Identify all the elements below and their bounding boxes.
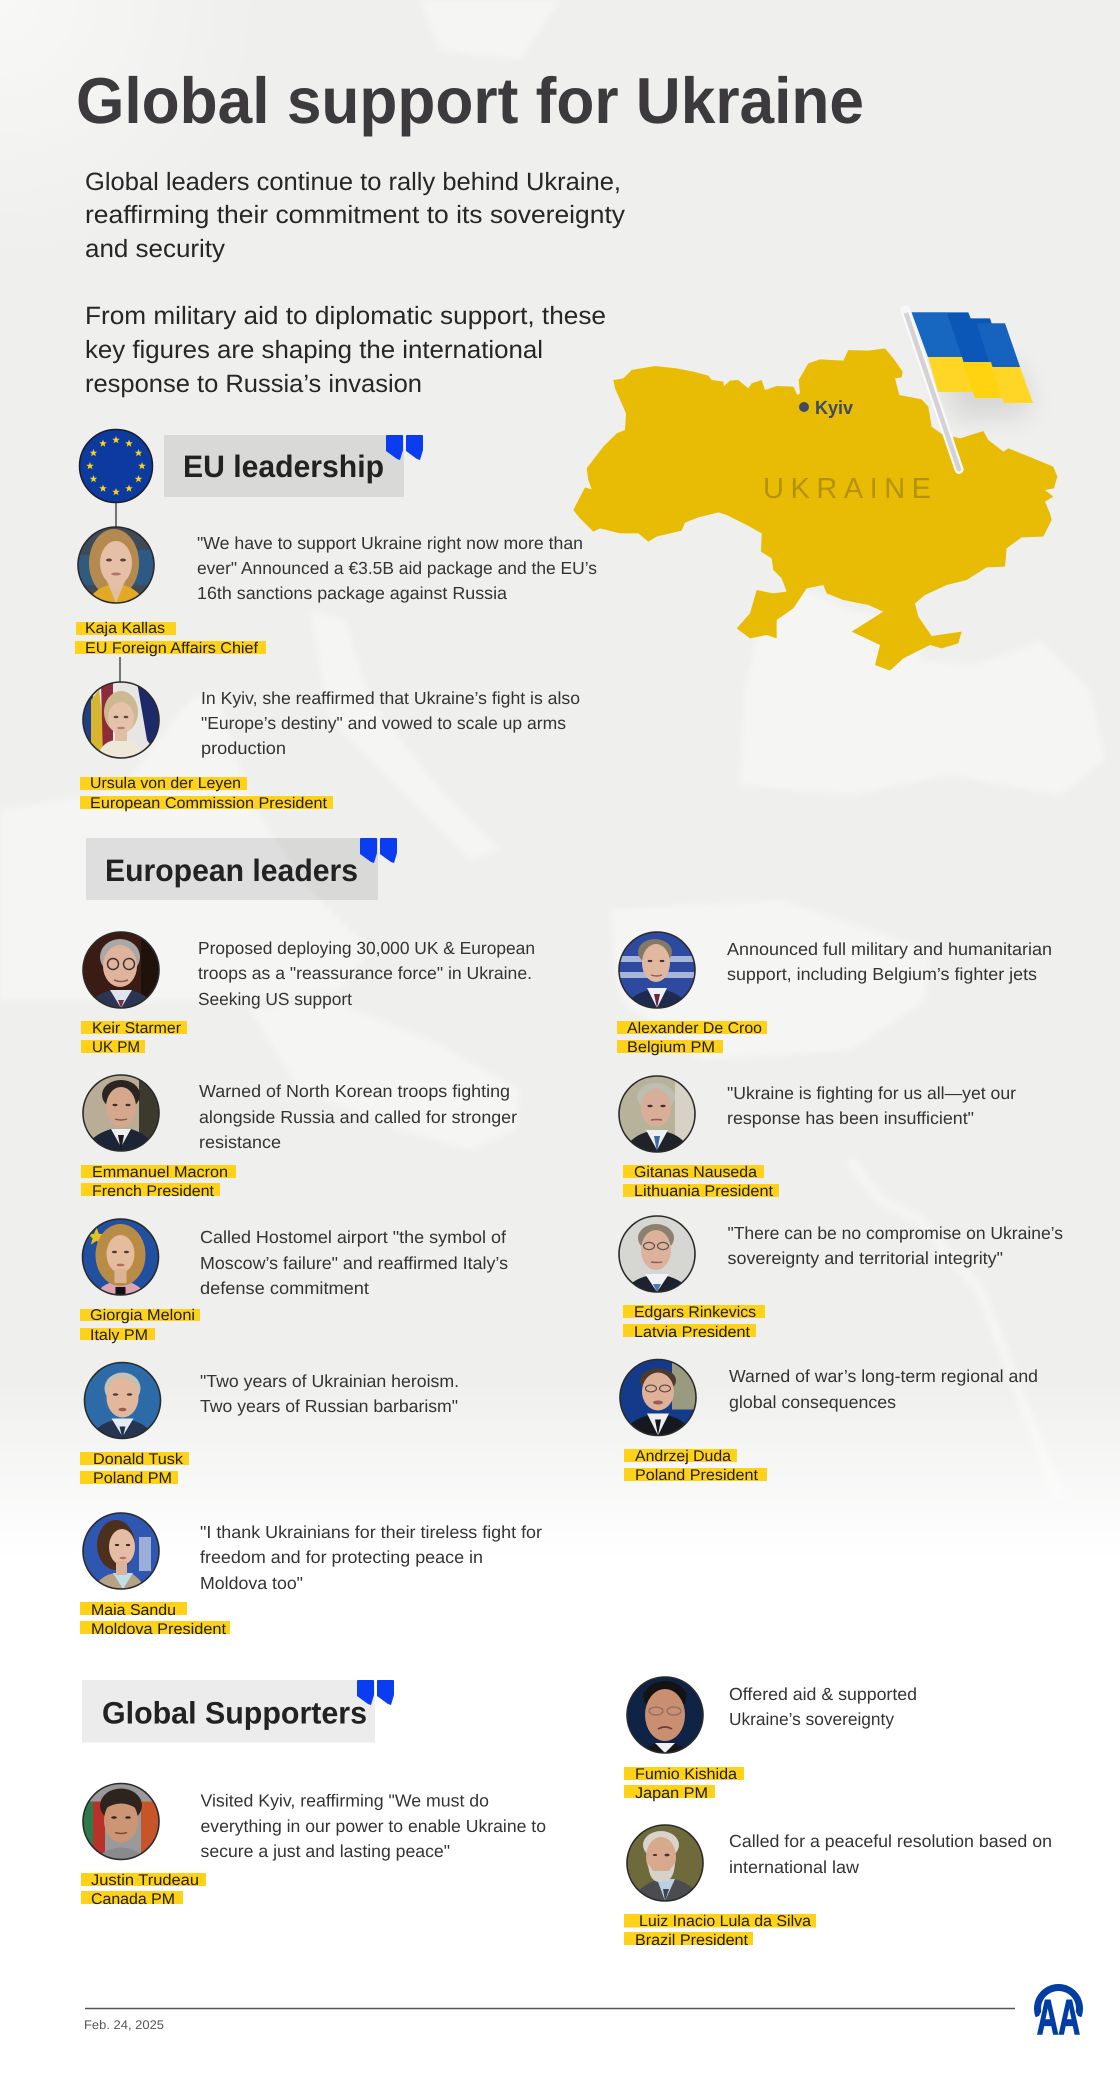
- quote: Moldova too": [200, 1573, 303, 1593]
- quote: response has been insufficient": [727, 1108, 974, 1128]
- intro text: and security: [85, 235, 226, 263]
- name label: Keir Starmer: [92, 1020, 181, 1037]
- quote: [199, 1081, 517, 1152]
- quote: [727, 939, 1052, 984]
- quote: [200, 1522, 542, 1593]
- quote: Offered aid & supported: [729, 1684, 917, 1704]
- name label: [81, 1164, 236, 1200]
- quote icon: [386, 435, 423, 460]
- name label: [81, 1020, 187, 1056]
- leader: Kaja Kallas: [75, 527, 597, 657]
- name label: Alexander De Croo: [627, 1020, 762, 1037]
- intro text: key figures are shaping the international: [85, 336, 543, 364]
- quote: Announced full military and humanitarian: [727, 939, 1052, 959]
- name label: Lithuania President: [634, 1183, 774, 1200]
- quote: [198, 938, 535, 1009]
- quote icon: [357, 1680, 394, 1705]
- name label: Italy PM: [90, 1327, 148, 1344]
- name label: [624, 1766, 744, 1802]
- EU flag icon: [80, 430, 152, 502]
- quote: [200, 1371, 459, 1416]
- quote: [727, 1083, 1016, 1128]
- footer: [84, 1987, 1088, 2045]
- quote: support, including Belgium’s fighter jets: [727, 964, 1037, 984]
- quote: everything in our power to enable Ukraine to: [200, 1816, 546, 1836]
- name label: Poland President: [635, 1467, 759, 1484]
- portrait: Lula: [627, 1825, 703, 1901]
- leader: Justin Trudeau: [81, 1784, 546, 1908]
- quote: [729, 1366, 1038, 1412]
- quote: global consequences: [729, 1392, 896, 1412]
- intro text: Global leaders continue to rally behind Ukraine,: [85, 168, 621, 196]
- name label: Justin Trudeau: [91, 1872, 199, 1889]
- quote: [197, 533, 597, 603]
- quote: Warned of war’s long-term regional and: [729, 1366, 1038, 1386]
- heading: European leaders: European leaders: [105, 853, 358, 888]
- quote: Moscow’s failure" and reaffirmed Italy’s: [200, 1253, 508, 1273]
- leader: Ursula von der Leyen: [80, 682, 580, 812]
- portrait: Kishida: [627, 1677, 703, 1753]
- flag: [902, 307, 1033, 469]
- Ukraine label: UKRAINE: [763, 473, 931, 505]
- name label: [75, 620, 266, 657]
- name label: Moldova President: [91, 1621, 227, 1638]
- name label: Kaja Kallas: [85, 620, 165, 637]
- name label: Poland PM: [93, 1470, 172, 1487]
- quote: "There can be no compromise on Ukraine’s: [728, 1223, 1063, 1243]
- leader: Giorgia Meloni: [80, 1219, 508, 1344]
- name label: [80, 1451, 189, 1487]
- portrait: Starmer: [83, 932, 159, 1008]
- quote icon: [360, 838, 397, 863]
- name label: European Commission President: [90, 795, 328, 812]
- quote: Visited Kyiv, reaffirming "We must do: [200, 1790, 489, 1810]
- name label: Donald Tusk: [93, 1451, 183, 1468]
- heading: European leaders: [86, 838, 378, 900]
- name label: French President: [92, 1183, 215, 1200]
- leader: Keir Starmer: [81, 932, 535, 1056]
- heading: EU leadership: [164, 435, 404, 497]
- portrait: Macron: [83, 1075, 159, 1151]
- quote: Two years of Russian barbarism": [200, 1396, 458, 1416]
- quote: "We have to support Ukraine right now more than: [197, 533, 583, 553]
- quote: "I thank Ukrainians for their tireless fight for: [200, 1522, 542, 1542]
- leader: Gitanas Nauseda: [619, 1076, 1016, 1200]
- Kyiv marker: [799, 398, 853, 419]
- name label: Fumio Kishida: [635, 1766, 737, 1783]
- quote: "Europe’s destiny" and vowed to scale up arms: [201, 713, 566, 733]
- quote: ever" Announced a €3.5B aid package and the EU’s: [197, 558, 597, 578]
- intro text: response to Russia’s invasion: [85, 370, 422, 398]
- portrait: Trudeau: [83, 1784, 159, 1860]
- quote: Called for a peaceful resolution based on: [729, 1831, 1052, 1851]
- name label: Japan PM: [635, 1785, 708, 1802]
- name label: [617, 1020, 767, 1056]
- leader: Donald Tusk: [80, 1362, 459, 1487]
- name label: [80, 1307, 200, 1344]
- quote: alongside Russia and called for stronger: [199, 1107, 517, 1127]
- name label: Edgars Rinkevics: [634, 1304, 756, 1321]
- section: European leaders: [80, 838, 1063, 1638]
- name label: Luiz Inacio Lula da Silva: [639, 1913, 811, 1930]
- quote: [200, 1227, 508, 1298]
- logo: AA: [1029, 1987, 1088, 2045]
- map shape: [573, 348, 1057, 671]
- name label: Canada PM: [91, 1891, 175, 1908]
- date: Feb. 24, 2025: [84, 2018, 164, 2032]
- name label: Emmanuel Macron: [92, 1164, 228, 1181]
- portrait: von der Leyen: [83, 682, 159, 758]
- name label: [80, 1602, 230, 1638]
- name label: Latvia President: [634, 1324, 751, 1341]
- name label: UK PM: [92, 1039, 140, 1056]
- heading: EU leadership: EU leadership: [183, 449, 384, 484]
- name label: [624, 1448, 767, 1484]
- quote: [728, 1223, 1063, 1268]
- section: Global Supporters: [81, 1677, 1052, 1949]
- quote: resistance: [199, 1132, 281, 1152]
- portrait: Duda: [620, 1360, 696, 1436]
- portrait: Nauseda: [619, 1076, 695, 1152]
- quote: [201, 688, 580, 758]
- name label: [80, 775, 333, 812]
- portrait: De Croo: [619, 932, 695, 1008]
- portrait: Tusk: [84, 1362, 160, 1438]
- quote: "Two years of Ukrainian heroism.: [200, 1371, 459, 1391]
- quote: In Kyiv, she reaffirmed that Ukraine’s fight is also: [201, 688, 580, 708]
- name label: EU Foreign Affairs Chief: [85, 640, 259, 657]
- quote: international law: [729, 1857, 859, 1877]
- portrait: Rinkevics: [619, 1216, 695, 1292]
- name label: Maia Sandu: [91, 1602, 176, 1619]
- quote: [200, 1790, 546, 1861]
- leader: Maia Sandu: [80, 1513, 542, 1638]
- quote: Ukraine’s sovereignty: [729, 1709, 894, 1729]
- intro text: From military aid to diplomatic support, these: [85, 302, 606, 330]
- quote: [729, 1831, 1052, 1877]
- portrait: Kallas: [78, 527, 154, 603]
- quote: sovereignty and territorial integrity": [728, 1248, 1003, 1268]
- quote: defense commitment: [200, 1278, 369, 1298]
- quote: Warned of North Korean troops fighting: [199, 1081, 510, 1101]
- name label: [623, 1304, 765, 1341]
- quote: 16th sanctions package against Russia: [197, 583, 507, 603]
- name label: Gitanas Nauseda: [634, 1164, 757, 1181]
- leader: Andrzej Duda: [620, 1360, 1038, 1484]
- name label: Giorgia Meloni: [90, 1307, 195, 1324]
- title: Global support for Ukraine: [76, 64, 864, 137]
- heading: Global Supporters: [82, 1680, 375, 1742]
- name label: [81, 1872, 206, 1908]
- intro text: [85, 168, 626, 398]
- heading: Global Supporters: Global Supporters: [102, 1696, 367, 1730]
- map of Ukraine with flag: [573, 307, 1057, 671]
- Kyiv marker: Kyiv: [815, 398, 853, 419]
- name label: Ursula von der Leyen: [90, 775, 241, 792]
- name label: [624, 1913, 816, 1949]
- leader: Fumio Kishida: [624, 1677, 917, 1802]
- leader: Alexander De Croo: [617, 932, 1052, 1056]
- portrait: Meloni: [82, 1219, 158, 1295]
- intro text: reaffirming their commitment to its sovereignty: [85, 201, 626, 229]
- section: EU leadership: [75, 430, 597, 812]
- portrait: Sandu: [83, 1513, 159, 1589]
- leader: Edgars Rinkevics: [619, 1216, 1063, 1341]
- name label: [623, 1164, 779, 1200]
- name label: Belgium PM: [627, 1039, 715, 1056]
- quote: Seeking US support: [198, 989, 352, 1009]
- quote: Proposed deploying 30,000 UK & European: [198, 938, 535, 958]
- quote: production: [201, 738, 286, 758]
- quote: secure a just and lasting peace": [200, 1841, 450, 1861]
- quote: Called Hostomel airport "the symbol of: [200, 1227, 506, 1247]
- name label: Andrzej Duda: [635, 1448, 731, 1465]
- quote: troops as a "reassurance force" in Ukraine.: [198, 963, 532, 983]
- quote: freedom and for protecting peace in: [200, 1547, 483, 1567]
- leader: Emmanuel Macron: [81, 1075, 517, 1200]
- quote: "Ukraine is fighting for us all—yet our: [727, 1083, 1016, 1103]
- logo: AA: AA: [1037, 1991, 1080, 2045]
- leader: Luiz Inacio Lula da Silva: [624, 1825, 1052, 1949]
- name label: Brazil President: [635, 1932, 749, 1949]
- quote: [729, 1684, 917, 1729]
